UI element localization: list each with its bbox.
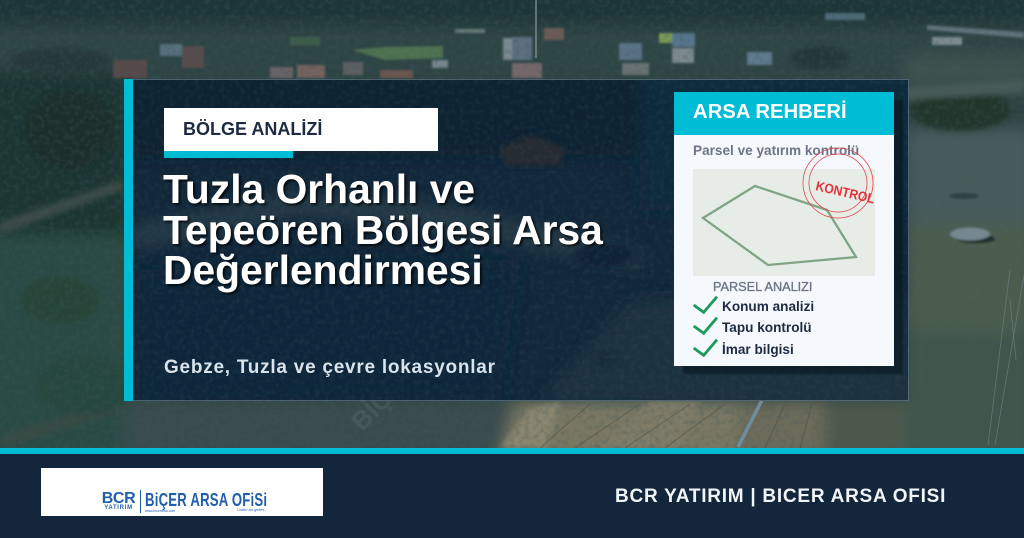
label background: [164, 108, 438, 151]
logo text: BiÇER ARSA OFiSi: [145, 490, 267, 510]
card header: ARSA REHBERİ: [693, 101, 847, 123]
footer accent line: [0, 448, 1024, 454]
title: Değerlendirmesi: [163, 247, 483, 293]
item: İmar bilgisi: İmar bilgisi: [722, 342, 794, 357]
title: [163, 166, 606, 296]
logo divider: [140, 490, 141, 513]
trees and land blotches: [0, 46, 1024, 448]
dirt furrows: [540, 404, 812, 448]
item: Konum analizi: [693, 296, 814, 314]
item: Konum analizi: Konum analizi: [722, 299, 814, 314]
label text: BÖLGE ANALİZİ: [183, 119, 322, 139]
title: Tuzla Orhanlı ve: [163, 166, 475, 212]
parcel map with stamp: [693, 148, 876, 276]
title: Tepeören Bölgesi Arsa: [163, 206, 603, 252]
parcel outline: [703, 186, 856, 265]
card shadow: [683, 100, 903, 374]
power lines and poles: [988, 270, 1024, 445]
item: Tapu kontrolü: Tapu kontrolü: [722, 320, 812, 335]
logo mark: BCR YATIRIM: BCR: [102, 490, 135, 507]
subtitle: Gebze, Tuzla ve çevre lokasyonlar: [164, 357, 496, 378]
card header: [674, 92, 894, 135]
card: ARSA REHBERİ: [674, 92, 894, 366]
card subtitle: Parsel ve yatırım kontrolü: [693, 143, 859, 158]
section label: BÖLGE ANALİZİ: [164, 108, 438, 158]
icon: check: [693, 316, 718, 336]
item: İmar bilgisi: [693, 338, 794, 358]
map background: [693, 169, 875, 276]
car: [949, 193, 995, 243]
stamp: KONTROL: [803, 148, 876, 218]
item: Tapu kontrolü: [693, 316, 812, 336]
logo small url: www.bicerarsa.com: [145, 509, 175, 513]
footer: [0, 448, 1024, 538]
panel accent bar: [124, 79, 133, 401]
logo box: [41, 468, 323, 516]
footer brand text: BCR YATIRIM | BICER ARSA OFISI: [615, 486, 946, 507]
main dark panel: [133, 79, 909, 401]
label accent underline: [164, 151, 293, 158]
logo mark: BCR YATIRIM: YATIRIM: [104, 505, 133, 511]
logo slogan: Ustün bu gelen...: [237, 507, 267, 512]
village buildings: [113, 13, 1024, 78]
watermark: BİÇ: [345, 383, 398, 436]
parcel analysis heading: PARSEL ANALIZI: [713, 280, 812, 294]
icon: check: [693, 338, 718, 358]
icon: check: [693, 296, 718, 314]
stamp: KONTROL: KONTROL: [814, 178, 876, 206]
checklist: [693, 296, 814, 358]
